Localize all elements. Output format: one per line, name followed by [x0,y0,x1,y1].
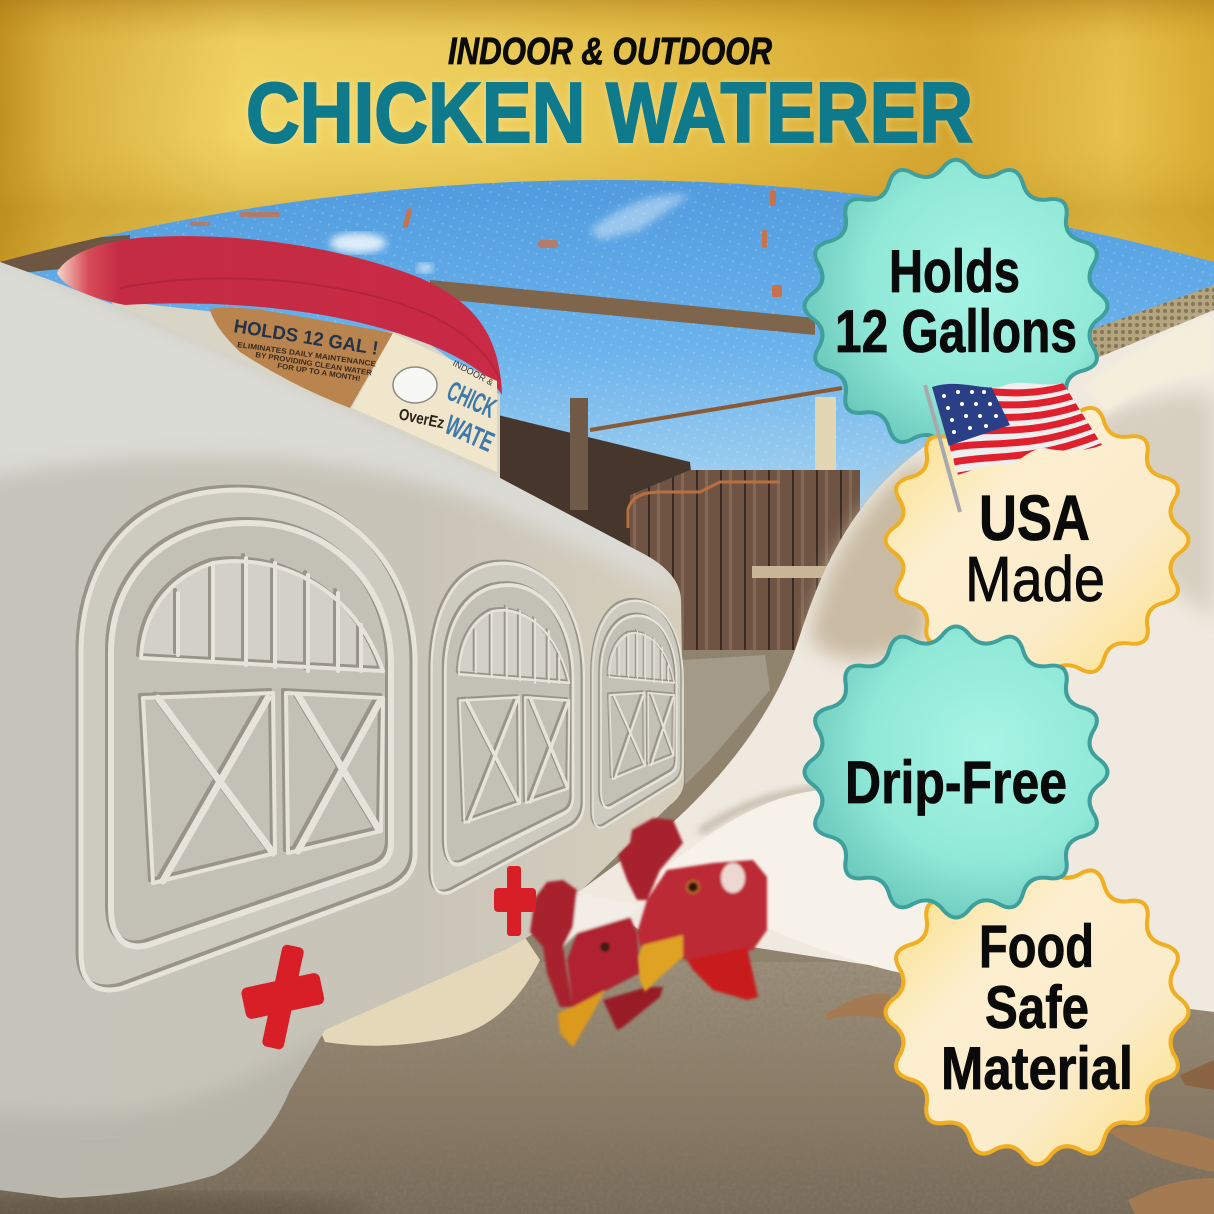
front chicken body [650,790,1005,985]
badge: USA Made [886,398,1188,682]
brand mark chicken [393,367,437,403]
ground behind tank [480,650,900,980]
comb [530,880,577,1007]
embossed barn door: large [78,487,415,990]
Made text: Made [965,543,1105,615]
clouds [330,194,690,273]
header: main title glow: CHICKEN WATERER [246,66,973,161]
rear chicken body [577,310,1214,1012]
embossed barn door: small [591,599,683,828]
waterer tank [0,240,690,1210]
flag cloth [932,382,1102,475]
front chicken head [618,818,767,1000]
distant mesh fence [1090,285,1214,365]
red lid [57,236,502,395]
branch [590,388,842,430]
label line 1: ELIMINATES DAILY MAINTENANCE [237,340,377,368]
top surface highlight [0,240,690,600]
flag canton [930,380,1010,446]
face [637,860,767,960]
badge: Food Safe Material [886,860,1188,1164]
icon: American flag [925,375,1110,512]
falling leaves on the net [190,190,782,297]
stones [682,655,770,785]
photo background: sky [0,150,1214,510]
mesh texture [1090,285,1214,365]
highlighted shoulder [1085,315,1214,415]
top surface and shadow shading [0,240,690,1210]
dark ground corner shading [0,1194,370,1214]
beak [638,935,683,992]
cream label [352,333,497,472]
bucket on top of the waterer [57,236,502,495]
red nipple: front [240,944,325,1050]
label line 3: FOR UP TO A MONTH! [277,361,361,383]
sky netting [0,170,1214,470]
USA text: USA [979,482,1090,554]
banner shading [0,0,1214,262]
wooden beam [430,280,815,335]
beak [558,990,605,1047]
shadow between the chickens [700,788,830,832]
chimney post [815,397,836,477]
chicken feet [826,994,1214,1214]
wattle [603,987,663,1030]
back cup [320,930,540,1046]
teal badge shape [805,160,1107,452]
bucket wall [110,300,500,495]
ear lobe [721,863,745,893]
12 Gallons text: 12 Gallons [835,298,1077,365]
white head feathers [563,893,640,947]
copper pipe [628,482,780,528]
badge: Drip-Free [805,626,1107,918]
wooden fence [630,470,860,660]
red nipple: rear [494,866,536,936]
header: small title: INDOOR & OUTDOOR [448,31,772,73]
gold label [210,308,393,408]
Holds text: Holds [889,238,1020,305]
comb [618,818,683,900]
shaded back feathers [1090,394,1214,620]
face [567,917,640,1007]
rear chicken head [530,880,663,1047]
flag stars [942,390,998,434]
main body [0,262,684,1198]
flag pole [925,385,960,512]
lower shadow [0,1044,316,1198]
eye [600,942,610,952]
fence rail [752,566,827,578]
wooden beam: left end [0,235,130,275]
label product line small: INDOOR & [451,358,495,388]
header: main title: CHICKEN WATERER [246,66,973,161]
embossed barn door: middle [429,561,584,893]
Food text: Food [979,913,1094,980]
label product name 2: WATE [441,409,499,458]
shed [498,415,700,560]
label heading: HOLDS 12 GAL ! [232,316,380,360]
ground grit texture [0,960,1214,1214]
Safe text: Safe [985,974,1089,1041]
label line 2: BY PROVIDING CLEAN WATER [255,350,373,378]
gold header banner [0,0,1214,262]
ground [0,962,1214,1214]
label product name 1: CHICK [443,375,501,424]
wattle [687,947,758,1000]
Material text: Material [941,1035,1133,1102]
eye [687,881,699,893]
body shading [810,455,930,659]
USA badge shape [886,398,1188,682]
lid rim shadow [120,278,500,380]
shed post [570,398,588,510]
badge: Holds 12 Gallons [805,160,1107,452]
food safe badge shape [886,860,1188,1164]
Drip-Free text: Drip-Free [845,749,1067,816]
brand name: OverEz [397,406,446,432]
drip-free badge shape [805,626,1107,918]
